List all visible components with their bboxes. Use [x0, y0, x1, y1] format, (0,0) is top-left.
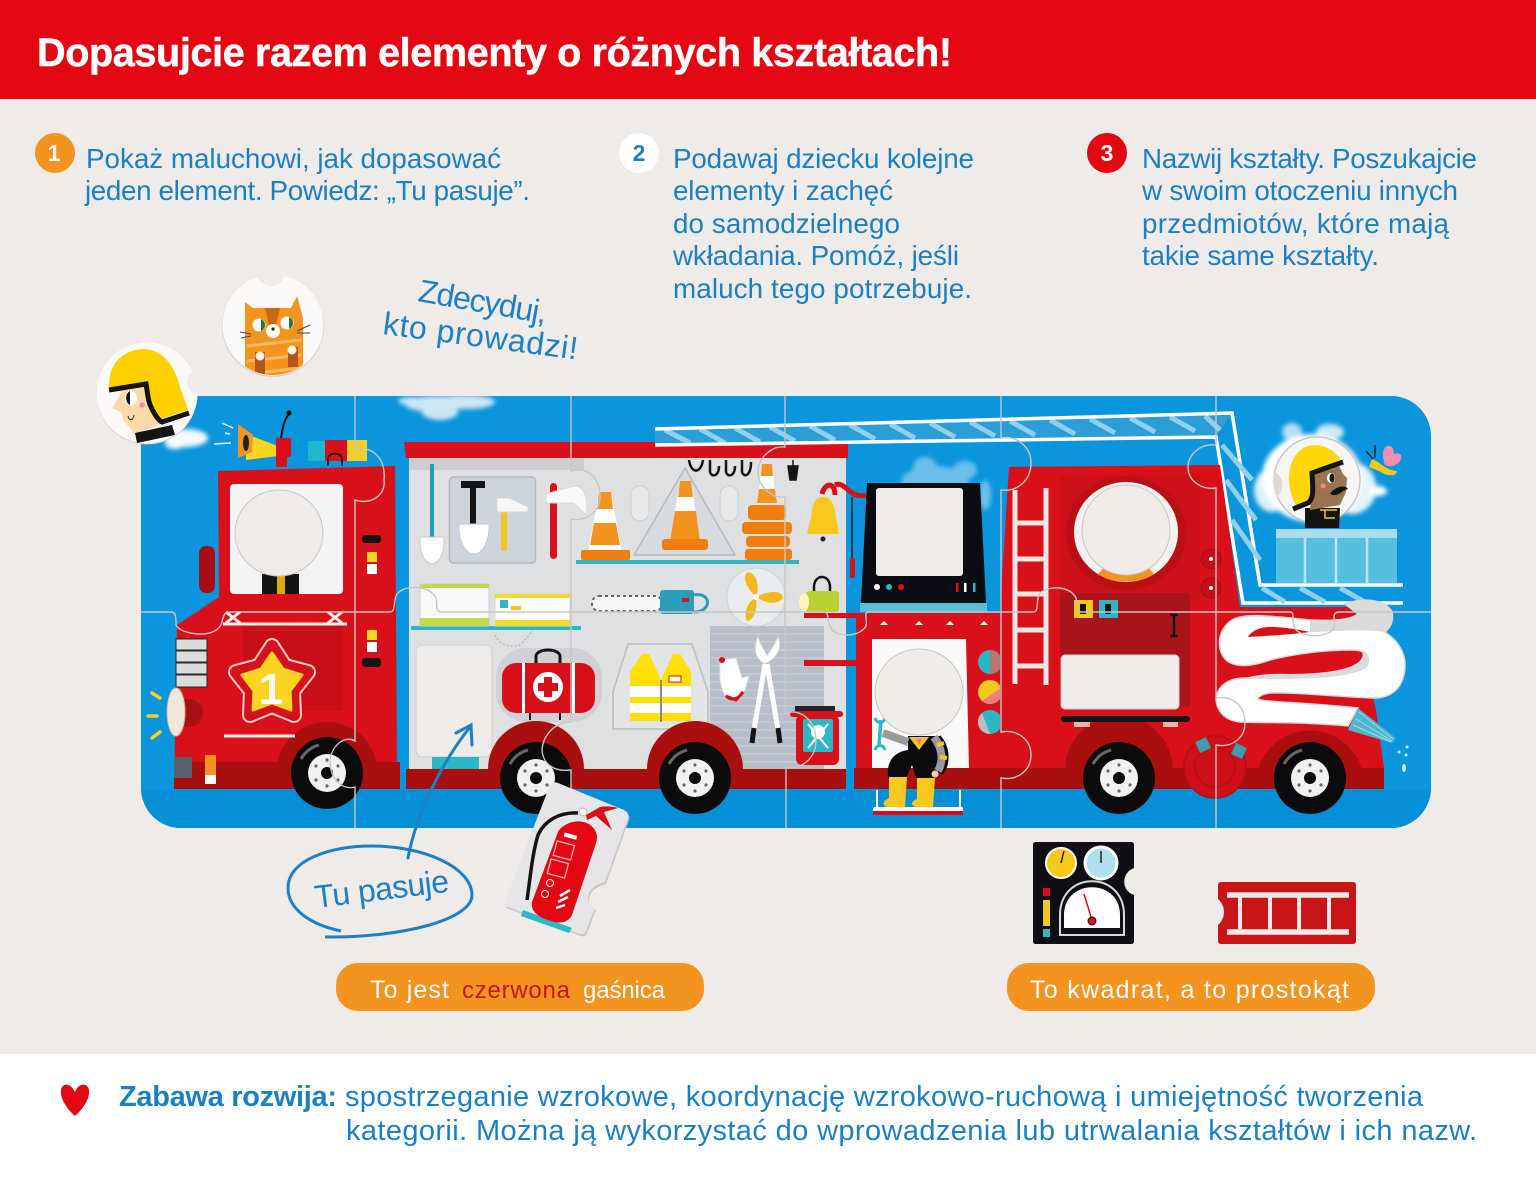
- monitor: [860, 483, 987, 612]
- nozzle ribs: [1353, 712, 1393, 742]
- cloud behind medallion: [1254, 423, 1387, 522]
- boots: [884, 777, 907, 807]
- right cab section: [1000, 465, 1384, 814]
- cab wheel: [291, 737, 363, 809]
- step 2: [619, 133, 974, 304]
- hatched panel: [710, 626, 824, 769]
- step 2: wkładania. Pomóż, jeśli: [672, 240, 959, 271]
- button: shapes phrase: [1007, 963, 1375, 1011]
- cab window: [230, 484, 343, 594]
- button: red extinguisher phrase: To jest: [370, 976, 449, 1004]
- basket: [1276, 529, 1397, 583]
- footer text: [119, 1081, 1477, 1147]
- control panel area: [1060, 593, 1190, 707]
- traffic cones: [581, 464, 792, 560]
- button: red extinguisher phrase: [336, 963, 704, 1011]
- header banner: [0, 0, 1536, 99]
- shelves: [576, 560, 799, 564]
- step 3: takie same kształty.: [1142, 240, 1379, 271]
- footer band: [0, 1054, 1536, 1199]
- fire extinguisher slot: [416, 645, 492, 757]
- switches: [1074, 600, 1178, 636]
- step 3: przedmiotów, które mają: [1142, 208, 1450, 239]
- poison jar: [790, 706, 843, 765]
- knobs: [1201, 549, 1221, 598]
- button: red extinguisher phrase: gaśnica: [583, 977, 666, 1004]
- door hole: [875, 649, 963, 735]
- cross bar: [223, 612, 347, 736]
- boxes: [420, 584, 570, 626]
- tool panel: [450, 477, 536, 563]
- loose piece: child in helmet: [96, 342, 213, 444]
- fire truck cab: left section: [148, 466, 400, 809]
- chainsaw: [592, 590, 708, 614]
- padlock light: [799, 577, 839, 612]
- siren and beacon: [214, 410, 367, 467]
- button: red extinguisher phrase: czerwona: [462, 977, 571, 1004]
- loose piece: cat: [222, 258, 324, 380]
- step 2: 2: [633, 140, 645, 166]
- puzzle board: fire truck: [141, 395, 1431, 830]
- handwritten note: decide who drives: Zdecyduj,: [416, 272, 550, 330]
- butterfly: [1366, 445, 1401, 475]
- star badge: 1: [259, 665, 283, 714]
- bottom chassis: [406, 769, 846, 789]
- headlight: [184, 699, 203, 727]
- fan: [727, 568, 785, 626]
- step 2: maluch tego potrzebuje.: [673, 273, 972, 304]
- title: Dopasujcie razem elementy o różnych kształtach!: [37, 31, 952, 75]
- boom ladder: [655, 413, 1403, 603]
- mirror: [199, 546, 215, 593]
- hose gap: [1248, 627, 1310, 637]
- firefighter medallion: [1274, 437, 1360, 528]
- water drops: [1398, 746, 1408, 772]
- tall shovel: [420, 464, 444, 564]
- step 2: Podawaj dziecku kolejne: [673, 143, 974, 174]
- step 3: w swoim otoczeniu innych: [1141, 175, 1458, 206]
- step 1: Pokaż maluchowi, jak dopasować: [86, 143, 501, 174]
- loose piece: fire extinguisher: [505, 782, 629, 936]
- step 2: do samodzielnego: [673, 208, 900, 239]
- middle control section: [804, 483, 1005, 815]
- hose reel: [1184, 736, 1247, 798]
- footer text: Zabawa rozwija:: [119, 1081, 337, 1113]
- footer text: kategorii. Można ją wykorzystać do wprowadzenia lub utrwalania kształtów i ich nazw.: [346, 1115, 1477, 1147]
- step 3: [1087, 133, 1477, 271]
- bell: [807, 484, 866, 578]
- puzzle seams: [141, 396, 1431, 828]
- plug: [788, 460, 798, 480]
- handwritten note: decide who drives: kto prowadzi!: [381, 305, 580, 367]
- hooks: [689, 460, 751, 475]
- star badge: [236, 646, 308, 715]
- loose piece: ladder (rectangle): [1218, 882, 1356, 944]
- fireman body: [938, 735, 949, 775]
- step 3: 3: [1101, 140, 1113, 166]
- button: shapes phrase: To kwadrat, a to prostokąt: [1030, 976, 1349, 1004]
- arrow: points to slot: [408, 725, 472, 858]
- footer text: spostrzeganie wzrokowe, koordynację wzrokowo-ruchową i umiejętność tworzenia: [345, 1081, 1424, 1113]
- handwritten note: decide who drives: [381, 272, 580, 367]
- clouds: [164, 395, 991, 510]
- side strip: [362, 535, 381, 667]
- hose: [1216, 600, 1408, 772]
- round stickers: [978, 650, 1002, 734]
- callout: it fits here: Tu pasuje: [312, 863, 451, 915]
- light rays: [148, 693, 160, 738]
- safety vest: [613, 644, 708, 729]
- round window: [1066, 476, 1186, 590]
- hose shading: [1245, 600, 1393, 678]
- icon: heart: [61, 1085, 89, 1116]
- small tags: [174, 757, 192, 778]
- bolt cutters: [752, 636, 780, 743]
- wheels: [1083, 742, 1155, 814]
- step 1: [35, 133, 530, 206]
- nozzle: [1348, 708, 1396, 743]
- door with fireman: [854, 621, 1004, 815]
- step 2: elementy i zachęć: [673, 175, 893, 206]
- grille: [176, 639, 207, 687]
- step 1: jeden element. Powiedz: „Tu pasuje”.: [84, 175, 530, 206]
- coiled hook: [495, 630, 532, 646]
- equipment body: [404, 442, 866, 814]
- side ladder: [1015, 488, 1046, 685]
- step 1: 1: [48, 140, 61, 166]
- roof: [404, 442, 848, 458]
- loose piece: gauges (square): [1033, 842, 1134, 944]
- axe: [546, 483, 587, 559]
- first aid bag: [496, 648, 602, 722]
- step 3: Nazwij kształty. Poszukajcie: [1142, 143, 1477, 174]
- glove: [719, 657, 749, 700]
- callout: it fits here: [288, 846, 472, 937]
